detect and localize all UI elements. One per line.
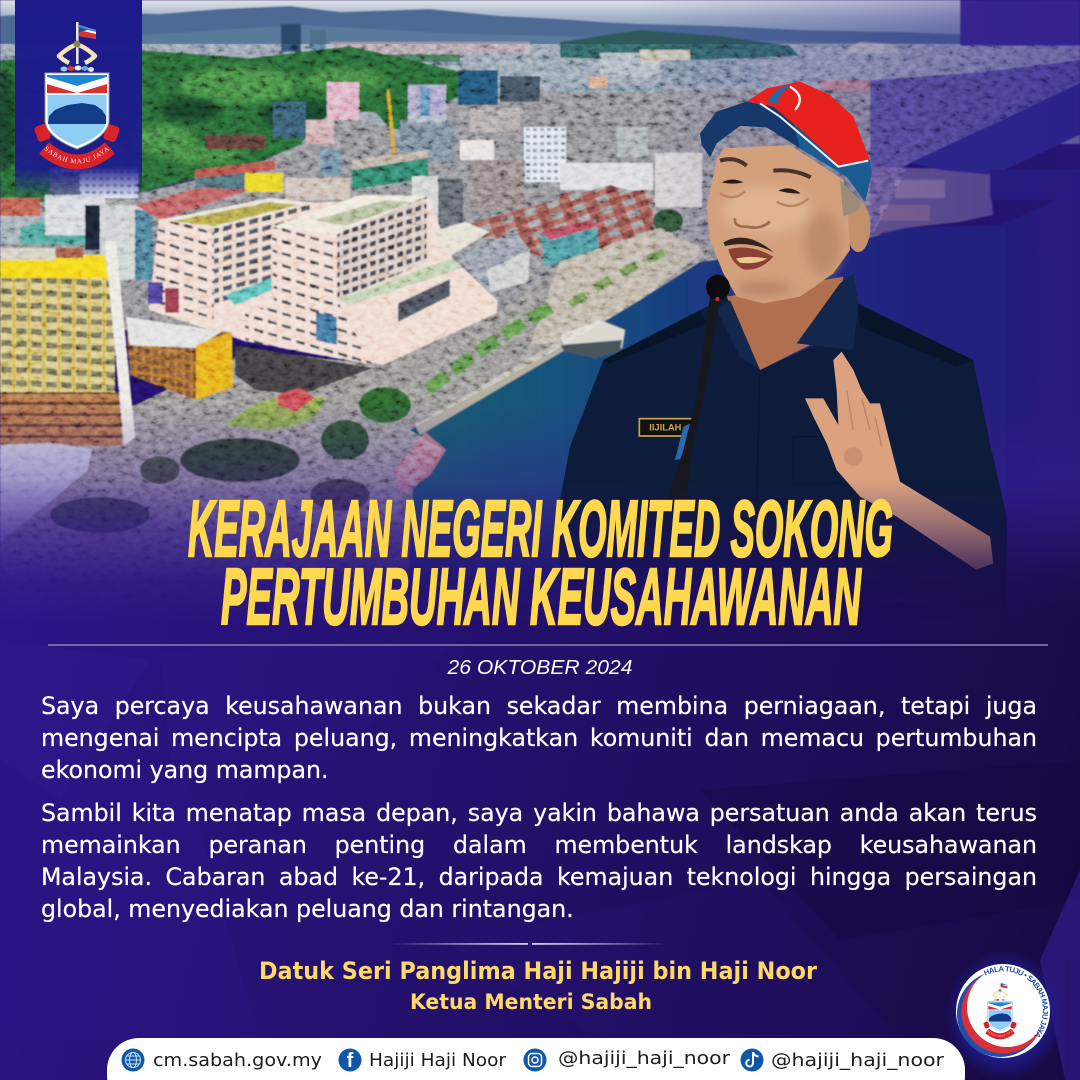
paragraph 1 — [41, 692, 1037, 784]
water — [405, 190, 1080, 640]
crest scrolls and ribbon: SABAH MAJU JAYA — [44, 146, 110, 164]
shirt — [560, 273, 1007, 637]
lower background panel — [0, 520, 1080, 1080]
signatory role: Ketua Menteri Sabah — [410, 990, 652, 1014]
moustache and mouth — [723, 238, 774, 270]
cap — [700, 82, 872, 202]
waterfront land and plaza — [0, 240, 720, 640]
brows, eyes, nose — [720, 159, 811, 228]
paragraph 2: Sambil kita menatap masa depan, saya yakin bahawa persatuan anda akan terus — [41, 799, 1037, 827]
tiktok link: @hajiji_haji_noor — [771, 1050, 945, 1071]
paragraph 2: global, menyediakan peluang dan rintangan. — [41, 895, 574, 923]
crest shield — [45, 73, 109, 149]
paragraph 1: ekonomi yang mampan. — [41, 756, 328, 784]
facebook link: f — [347, 1050, 354, 1072]
face — [707, 145, 850, 303]
paragraph 2: memainkan peranan penting dalam membentuk landskap keusahawanan — [41, 831, 1037, 859]
instagram link — [524, 1048, 731, 1072]
neck — [727, 277, 843, 370]
tiktok link — [740, 1048, 945, 1072]
face shading — [723, 187, 842, 296]
midground city base — [0, 90, 880, 330]
person: speaker in cap — [560, 82, 1007, 637]
pen — [675, 423, 691, 460]
grey sideburn — [840, 180, 862, 217]
paragraph 2: Malaysia. Cabaran abad ke-21, daripada kemajuan teknologi hingga persaingan — [41, 863, 1037, 891]
harbour land — [870, 0, 1080, 236]
midground buildings — [0, 70, 702, 280]
orange building — [126, 317, 233, 400]
collar — [797, 273, 858, 350]
signatory name: Datuk Seri Panglima Haji Hajiji bin Haji Noor — [259, 957, 817, 985]
distant city blocks — [281, 24, 880, 132]
photo texture — [0, 44, 1080, 550]
instagram link: @hajiji_haji_noor — [558, 1048, 731, 1069]
date: 26 OKTOBER 2024 — [446, 657, 632, 679]
lower background facets — [0, 640, 1080, 1080]
microphone — [667, 275, 730, 500]
paragraph 2 — [41, 799, 1037, 923]
crest arms — [59, 45, 95, 63]
yellow tower — [0, 241, 135, 446]
circular logo — [948, 953, 1057, 1078]
crest flag — [76, 22, 96, 64]
lower left building — [0, 443, 92, 542]
city photo background — [0, 0, 1080, 640]
ear — [846, 201, 870, 252]
crest panel — [15, 0, 142, 198]
name tag: IIJILAH — [649, 422, 682, 432]
facebook link: Hajiji Haji Noor — [369, 1050, 507, 1071]
bottom fade into purple — [0, 485, 1080, 641]
crest beads — [60, 66, 94, 72]
paragraph 1: mengenai mencipta peluang, meningkatkan komuniti dan memacu pertumbuhan — [41, 724, 1037, 752]
circular logo: HALA TUJU • SABAH MAJU JAYA — [984, 966, 1048, 1037]
social links bar — [107, 1038, 965, 1080]
right purple tint over photo — [640, 0, 1080, 520]
website link: cm.sabah.gov.my — [153, 1050, 322, 1071]
paragraph 1: Saya percaya keusahawanan bukan sekadar membina perniagaan, tetapi juga — [41, 692, 1037, 720]
title — [188, 484, 893, 641]
sky and mountains — [0, 0, 1080, 144]
roundabout and trees — [50, 250, 670, 533]
crest scrolls and ribbon — [34, 124, 120, 170]
green hill — [0, 46, 470, 205]
purple tint over lower photo — [0, 400, 1080, 640]
state crest — [34, 22, 120, 170]
raised hand — [805, 352, 993, 570]
grand hotel complex — [148, 195, 497, 365]
grey mall block — [455, 232, 530, 292]
name tag — [639, 419, 693, 436]
